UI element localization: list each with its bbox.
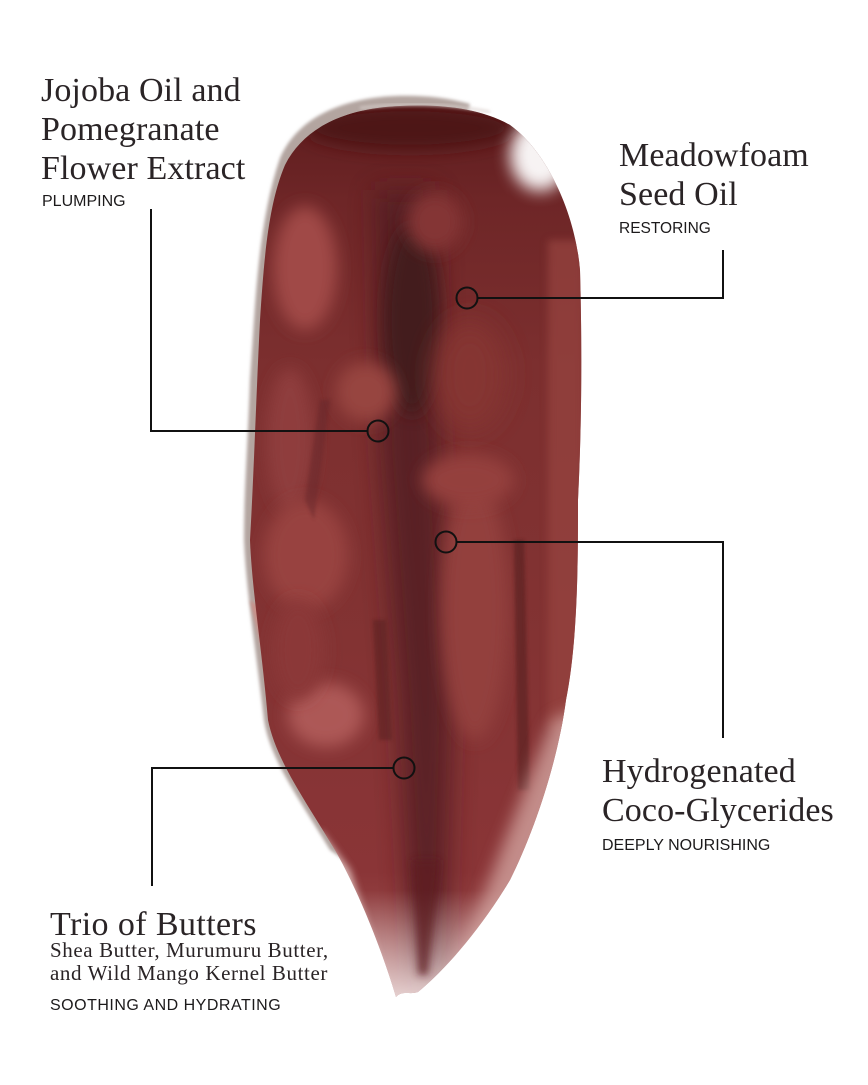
leader line: meadowfoam [456, 250, 723, 308]
vertical dark ridges [514, 540, 530, 790]
central tail streak [412, 860, 440, 975]
callout: butters: and Wild Mango Kernel Butter [50, 961, 328, 985]
callout: jojoba: PLUMPING [42, 193, 126, 210]
callout: coco-glycerides: DEEPLY NOURISHING [602, 837, 770, 854]
callout: coco-glycerides [602, 753, 834, 854]
callout: butters [50, 906, 329, 1014]
callout: coco-glycerides: Hydrogenated [602, 753, 796, 790]
callout: meadowfoam: Seed Oil [619, 176, 738, 213]
dark central streak [375, 190, 452, 980]
leader line: coco-glycerides [436, 532, 723, 738]
leader line: butters [152, 758, 414, 886]
callout: jojoba: Pomegranate [41, 111, 220, 148]
left highlight blobs [273, 206, 337, 330]
lipstick smear swatch [150, 94, 724, 997]
callout: jojoba: Flower Extract [41, 150, 245, 187]
leader line: jojoba [151, 209, 388, 442]
callout: meadowfoam: Meadowfoam [619, 137, 809, 174]
callout: jojoba: Jojoba Oil and [41, 72, 241, 109]
smear body [250, 106, 582, 997]
left fragment of the smear [250, 600, 268, 650]
lower fade [360, 896, 490, 997]
callout: butters: Shea Butter, Murumuru Butter, [50, 938, 329, 962]
grey outer edge of the smear [244, 96, 470, 900]
callout: butters: Trio of Butters [50, 906, 257, 943]
thin white streak on top edge [360, 105, 490, 112]
callout: meadowfoam [619, 137, 809, 237]
callout: meadowfoam: RESTORING [619, 220, 711, 237]
callout: jojoba [41, 72, 246, 210]
callout: coco-glycerides: Coco-Glycerides [602, 792, 834, 829]
top right highlight [510, 119, 570, 191]
right edge tone [548, 240, 584, 730]
dark top band [305, 106, 515, 150]
callout: butters: SOOTHING AND HYDRATING [50, 997, 281, 1014]
